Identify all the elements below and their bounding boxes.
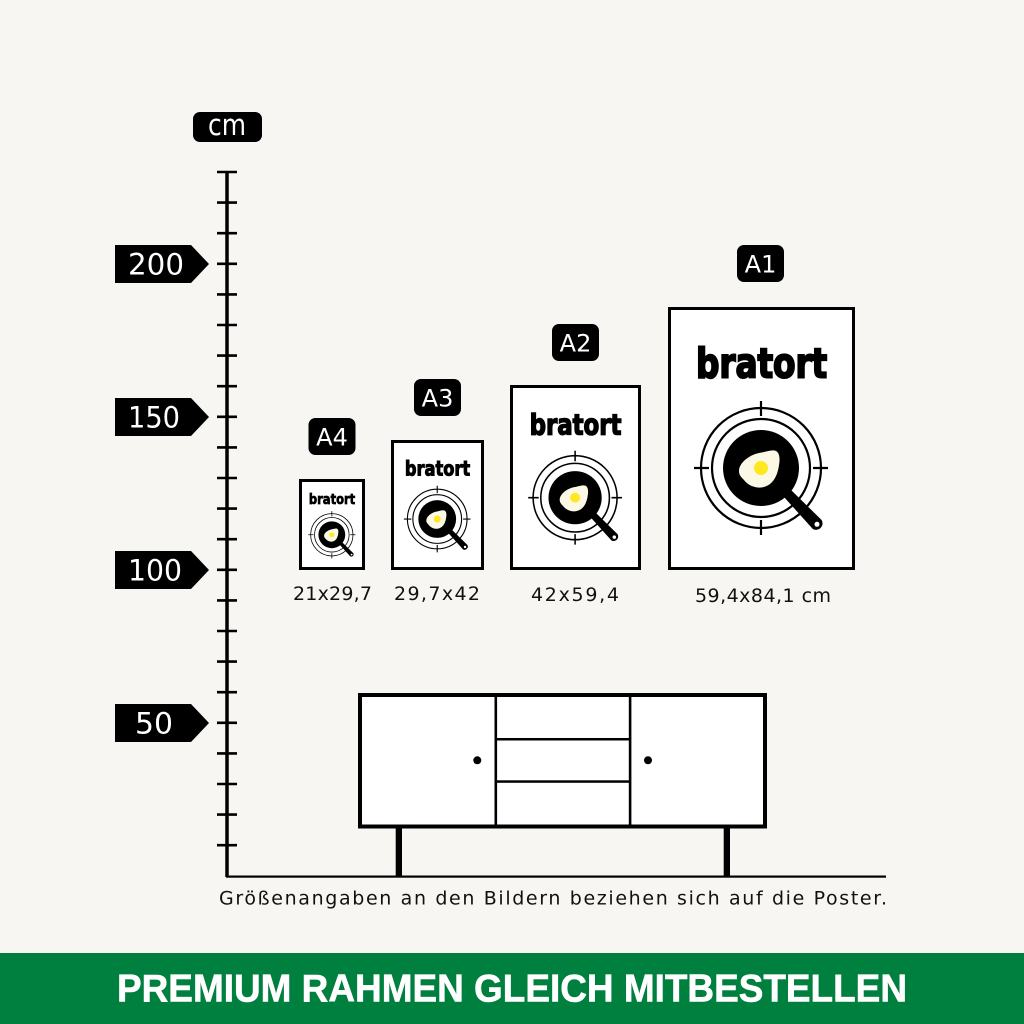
scale tag: 200	[115, 245, 209, 283]
size badge: A1	[737, 245, 784, 282]
size badge: A3: A3	[422, 384, 453, 412]
scale tag: 100: 100	[128, 554, 182, 588]
size label: A1: 59,4x84,1 cm	[695, 585, 831, 607]
unit badge: cm	[193, 108, 262, 142]
scale tag: 100	[115, 551, 209, 589]
poster: A4	[300, 480, 364, 568]
size badge: A4: A4	[316, 424, 348, 452]
scale tag: 150: 150	[128, 400, 180, 434]
size label: A2: 42x59,4	[531, 584, 619, 606]
floor line	[226, 876, 886, 878]
size badge: A2	[552, 324, 599, 361]
size badge: A3	[414, 379, 461, 416]
size badge: A1: A1	[745, 250, 776, 278]
scale tag: 200: 200	[128, 248, 184, 282]
poster: A3	[392, 442, 482, 568]
poster: A4: bratort	[309, 492, 355, 508]
sideboard furniture	[360, 695, 765, 876]
height scale axis	[217, 172, 237, 877]
poster: A1	[670, 308, 854, 568]
footer banner	[0, 953, 1024, 1024]
scale tag: 50: 50	[135, 706, 173, 740]
footer banner: PREMIUM RAHMEN GLEICH MITBESTELLEN	[117, 968, 907, 1010]
poster: A2	[512, 386, 640, 568]
scale tag: 150	[115, 398, 209, 436]
unit badge: cm: cm	[208, 108, 246, 142]
size badge: A2: A2	[560, 330, 591, 358]
caption: Größenangaben an den Bildern beziehen sich auf die Poster.	[219, 888, 887, 910]
size badge: A4	[308, 418, 356, 455]
size label: A4: 21x29,7	[293, 583, 372, 605]
scale tag: 50	[115, 704, 209, 742]
poster: A2: bratort	[530, 409, 621, 442]
poster: A3: bratort	[405, 458, 470, 481]
size label: A3: 29,7x42	[394, 583, 480, 605]
poster: A1: bratort	[696, 340, 827, 387]
